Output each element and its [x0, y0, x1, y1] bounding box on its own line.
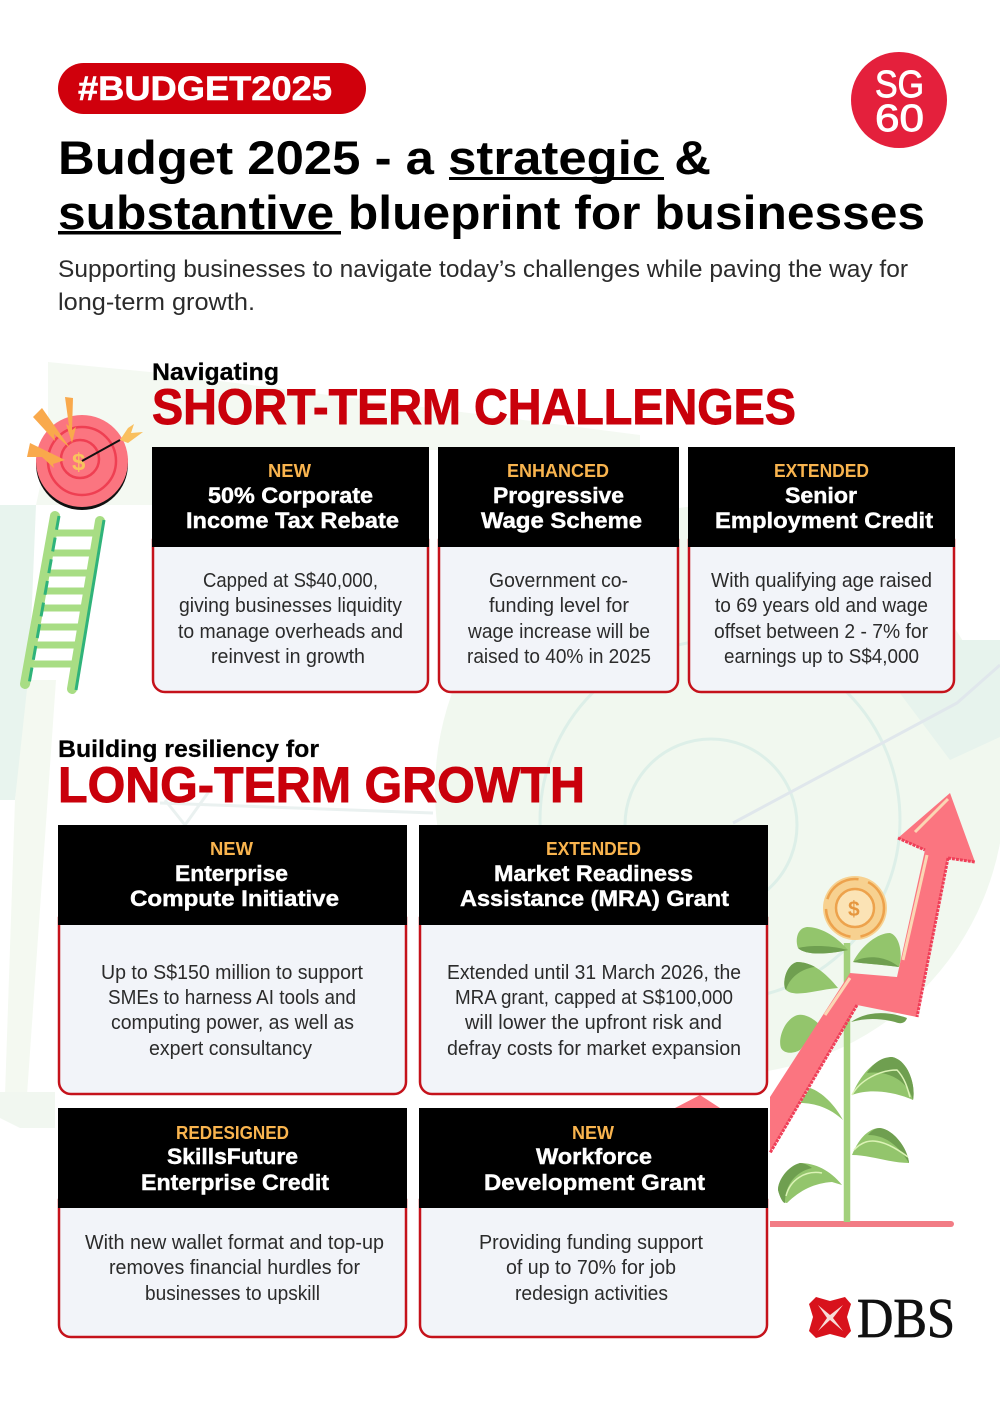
card: workforce development grant: of up to 70% for job [506, 1257, 676, 1279]
card: workforce development grant: redesign activities [515, 1283, 668, 1305]
card: progressive wage scheme: wage increase will be [467, 621, 650, 643]
card: enterprise compute initiative: Enterprise [175, 861, 288, 886]
card: skillsfuture enterprise credit: businesses to upskill [145, 1283, 320, 1305]
card: corporate income tax rebate: Income Tax Rebate [186, 508, 399, 533]
SG60 logo: 60 [875, 98, 924, 140]
card: market readiness assistance grant: Market Readiness [494, 861, 693, 886]
card: enterprise compute initiative: Compute Initiative [130, 886, 339, 911]
card: corporate income tax rebate: giving businesses liquidity [179, 595, 402, 617]
card: enterprise compute initiative: computing power, as well as [111, 1012, 354, 1034]
icon: target with arrow [27, 397, 143, 510]
card: market readiness assistance grant [419, 825, 768, 1094]
card: senior employment credit: earnings up to S$4,000 [724, 646, 919, 668]
card: corporate income tax rebate [152, 447, 429, 692]
card: skillsfuture enterprise credit: REDESIGNED [176, 1123, 289, 1143]
icon: growth arrow [675, 793, 975, 1153]
icon: target with arrow: $ [72, 449, 86, 476]
hashtag pill [58, 63, 366, 114]
card: progressive wage scheme: Progressive [493, 483, 624, 508]
card: market readiness assistance grant: EXTENDED [546, 839, 641, 859]
card: skillsfuture enterprise credit [58, 1108, 407, 1337]
card: skillsfuture enterprise credit: Enterprise Credit [141, 1170, 330, 1195]
card: corporate income tax rebate: NEW [268, 461, 311, 481]
DBS logo: DBS [857, 1288, 955, 1350]
card: progressive wage scheme: funding level for [489, 595, 629, 617]
card: corporate income tax rebate: to manage overheads and [178, 621, 403, 643]
card: enterprise compute initiative: NEW [210, 839, 253, 859]
card: senior employment credit: Employment Credit [715, 508, 934, 533]
card: progressive wage scheme: ENHANCED [507, 461, 609, 481]
SG60 logo: SG [875, 64, 924, 106]
title [58, 131, 925, 239]
subtitle: long-term growth. [58, 289, 255, 316]
icon: ladder [25, 516, 104, 690]
hashtag pill: #BUDGET2025 [78, 70, 332, 108]
card: enterprise compute initiative: expert consultancy [149, 1038, 312, 1060]
card: senior employment credit: offset between 2 - 7% for [714, 621, 928, 643]
title: Budget 2025 - a strategic & [58, 131, 711, 184]
card: senior employment credit [688, 447, 955, 692]
section heading: long-term: LONG-TERM GROWTH [58, 757, 585, 813]
card: market readiness assistance grant: MRA grant, capped at S$100,000 [455, 987, 733, 1009]
card: corporate income tax rebate: 50% Corporate [208, 483, 373, 508]
card: workforce development grant: Providing funding support [479, 1232, 703, 1254]
card: enterprise compute initiative: Up to S$150 million to support [101, 962, 363, 984]
title: substantive blueprint for businesses [58, 186, 925, 239]
icon: plant with coin [770, 876, 954, 1227]
card: progressive wage scheme: Wage Scheme [481, 508, 642, 533]
card: market readiness assistance grant: Assistance (MRA) Grant [460, 886, 730, 911]
card: skillsfuture enterprise credit: With new wallet format and top-up [85, 1232, 384, 1254]
card: workforce development grant [419, 1108, 768, 1337]
card: skillsfuture enterprise credit: SkillsFuture [167, 1144, 298, 1169]
card: progressive wage scheme: Government co- [489, 570, 628, 592]
subtitle: Supporting businesses to navigate today’s challenges while paving the way for [58, 256, 908, 283]
SG60 logo [851, 52, 947, 148]
card: corporate income tax rebate: Capped at S$40,000, [203, 570, 378, 592]
card: senior employment credit: to 69 years old and wage [715, 595, 928, 617]
card: progressive wage scheme: raised to 40% in 2025 [467, 646, 651, 668]
subtitle [58, 256, 908, 316]
card: senior employment credit: Senior [785, 483, 857, 508]
card: enterprise compute initiative: SMEs to harness AI tools and [108, 987, 356, 1009]
card: enterprise compute initiative [58, 825, 407, 1094]
section heading: short-term: Navigating [152, 359, 279, 386]
card: progressive wage scheme [438, 447, 679, 692]
card: market readiness assistance grant: will lower the upfront risk and [464, 1012, 722, 1034]
card: workforce development grant: NEW [572, 1123, 614, 1143]
section heading: long-term: Building resiliency for [58, 736, 319, 763]
card: workforce development grant: Workforce [536, 1144, 652, 1169]
card: workforce development grant: Development Grant [484, 1170, 706, 1195]
icon: plant with coin: $ [848, 898, 860, 921]
card: market readiness assistance grant: defray costs for market expansion [447, 1038, 741, 1060]
card: senior employment credit: EXTENDED [774, 461, 869, 481]
card: corporate income tax rebate: reinvest in growth [211, 646, 365, 668]
card: skillsfuture enterprise credit: removes financial hurdles for [109, 1257, 360, 1279]
DBS logo [809, 1288, 955, 1350]
card: senior employment credit: With qualifying age raised [711, 570, 932, 592]
card: market readiness assistance grant: Extended until 31 March 2026, the [447, 962, 741, 984]
section heading: short-term: SHORT-TERM CHALLENGES [152, 379, 796, 435]
